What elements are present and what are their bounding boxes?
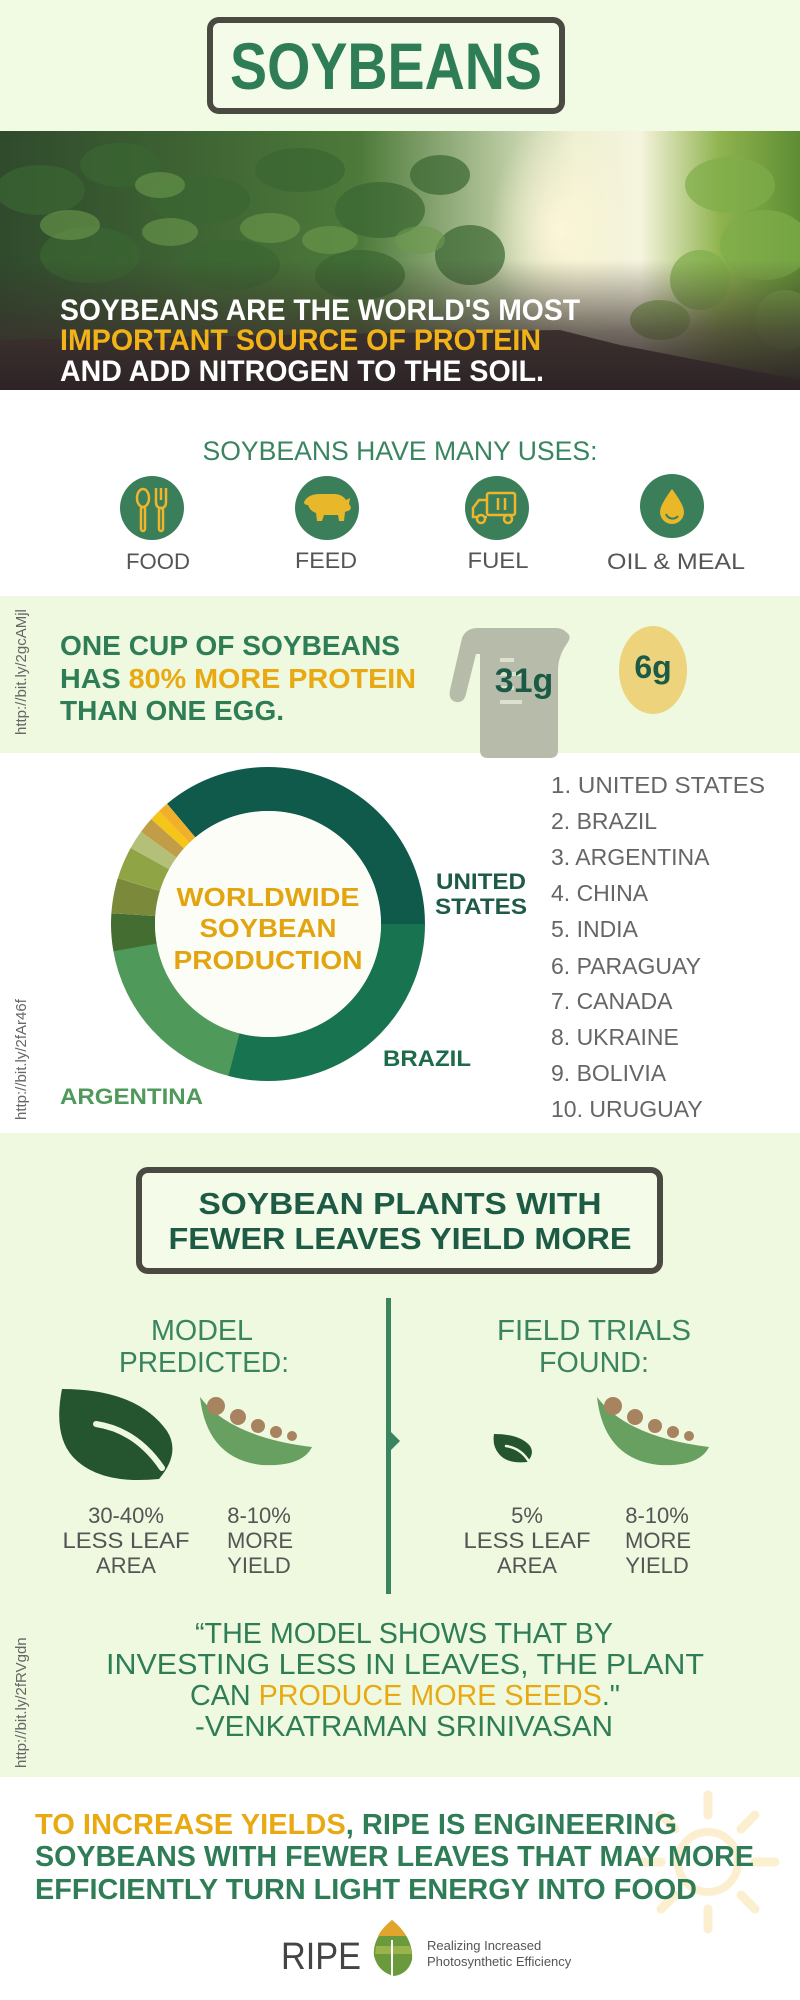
source url 2: http://bit.ly/2fAr46f	[13, 998, 30, 1120]
right labels: 5%	[511, 1503, 543, 1528]
icon: faint sun	[641, 1795, 775, 1929]
field trials heading: FOUND:	[539, 1347, 649, 1379]
list: top producers: 7. CANADA	[551, 988, 673, 1014]
list: top producers: 6. PARAGUAY	[551, 953, 701, 979]
field trials heading: FIELD TRIALS	[497, 1315, 691, 1347]
list: top producers: 10. URUGUAY	[551, 1096, 703, 1122]
list: top producers: 4. CHINA	[551, 880, 649, 906]
bottom statement	[35, 1809, 754, 1906]
list: top producers	[551, 772, 765, 1122]
use labels: FEED	[295, 548, 357, 573]
use labels: FOOD	[126, 549, 190, 574]
field trials heading	[497, 1315, 691, 1379]
photo caption text: AND ADD NITROGEN TO THE SOIL.	[60, 355, 544, 388]
icon: right pod	[597, 1397, 709, 1465]
background: top band	[0, 0, 800, 131]
title: SOYBEANS	[230, 29, 542, 103]
left labels: YIELD	[227, 1553, 291, 1578]
use labels: OIL & MEAL	[607, 549, 745, 574]
right labels: YIELD	[625, 1553, 689, 1578]
left labels	[62, 1503, 293, 1578]
logo: RIPE: RIPE	[281, 1936, 361, 1978]
icon: feed (pig)	[295, 476, 359, 540]
list: top producers: 2. BRAZIL	[551, 808, 657, 834]
photo caption text	[60, 294, 580, 388]
heading box: FEWER LEAVES YIELD MORE	[168, 1221, 632, 1256]
model predicted heading: PREDICTED:	[119, 1347, 289, 1379]
icon: big leaf	[59, 1389, 172, 1480]
list: top producers: 9. BOLIVIA	[551, 1060, 667, 1086]
panel: fewer leaves yield more	[0, 1133, 800, 1777]
protein text	[60, 630, 416, 726]
chart labels: ARGENTINA	[60, 1084, 203, 1109]
logo: RIPE: Realizing Increased	[427, 1938, 541, 1953]
photo caption text: SOYBEANS ARE THE WORLD'S MOST	[60, 294, 580, 327]
bottom statement: SOYBEANS WITH FEWER LEAVES THAT MAY MORE	[35, 1841, 754, 1873]
list: top producers: 1. UNITED STATES	[551, 772, 765, 798]
icon: small leaf	[494, 1434, 532, 1462]
icon: egg: 6g	[634, 649, 672, 685]
list: top producers: 3. ARGENTINA	[551, 844, 710, 870]
heading box	[139, 1170, 660, 1271]
source url 1: http://bit.ly/2gcAMjl	[13, 609, 30, 735]
icon: fuel (truck)	[465, 476, 529, 540]
right labels: LESS LEAF	[464, 1528, 590, 1553]
right labels	[464, 1503, 691, 1578]
logo: RIPE	[281, 1920, 572, 1978]
photo: soybean field	[0, 120, 800, 390]
use labels: FUEL	[468, 548, 528, 573]
chart labels: BRAZIL	[383, 1046, 471, 1071]
quote: “THE MODEL SHOWS THAT BY	[195, 1618, 613, 1650]
protein text: HAS 80% MORE PROTEIN	[60, 663, 416, 694]
source url 3: http://bit.ly/2fRVgdn	[13, 1637, 30, 1768]
use labels	[126, 548, 745, 574]
left labels: AREA	[96, 1553, 156, 1578]
chart center label: PRODUCTION	[174, 945, 362, 975]
list: top producers: 5. INDIA	[551, 916, 639, 942]
chart labels	[60, 869, 527, 1109]
quote: -VENKATRAMAN SRINIVASAN	[195, 1711, 613, 1743]
bottom statement: EFFICIENTLY TURN LIGHT ENERGY INTO FOOD	[35, 1874, 697, 1906]
chart labels: STATES	[435, 894, 527, 919]
left labels: LESS LEAF	[62, 1528, 190, 1553]
icon: big pod	[200, 1397, 312, 1465]
protein text: THAN ONE EGG.	[60, 695, 284, 726]
right labels: MORE	[625, 1528, 691, 1553]
photo caption text: IMPORTANT SOURCE OF PROTEIN	[60, 324, 541, 357]
quote: INVESTING LESS IN LEAVES, THE PLANT	[106, 1649, 704, 1681]
panel: protein comparison	[0, 596, 800, 758]
left labels: MORE	[227, 1528, 293, 1553]
model predicted heading	[119, 1315, 289, 1379]
protein text: ONE CUP OF SOYBEANS	[60, 630, 400, 661]
right labels: 8-10%	[625, 1503, 689, 1528]
uses heading: SOYBEANS HAVE MANY USES:	[202, 436, 598, 466]
chart center label: WORLDWIDE	[176, 882, 360, 912]
chart center label: SOYBEAN	[200, 913, 336, 943]
icon: measuring cup: 31g	[495, 662, 553, 700]
model predicted heading: MODEL	[151, 1315, 253, 1347]
quote: CAN PRODUCE MORE SEEDS."	[190, 1680, 620, 1712]
quote	[106, 1618, 704, 1743]
bottom statement: TO INCREASE YIELDS, RIPE IS ENGINEERING	[35, 1809, 677, 1841]
icon: oil drop	[640, 474, 704, 538]
divider with arrow	[386, 1298, 400, 1594]
list: top producers: 8. UKRAINE	[551, 1024, 679, 1050]
icon: food	[120, 476, 184, 540]
icon: egg	[619, 626, 687, 714]
chart: worldwide production donut	[77, 733, 459, 1115]
icon: measuring cup	[450, 628, 570, 758]
heading box: SOYBEAN PLANTS WITH	[198, 1186, 602, 1221]
logo: RIPE: Photosynthetic Efficiency	[427, 1954, 572, 1969]
chart center label	[174, 882, 362, 975]
left labels: 8-10%	[227, 1503, 291, 1528]
chart labels: UNITED	[436, 869, 526, 894]
right labels: AREA	[497, 1553, 557, 1578]
left labels: 30-40%	[88, 1503, 164, 1528]
